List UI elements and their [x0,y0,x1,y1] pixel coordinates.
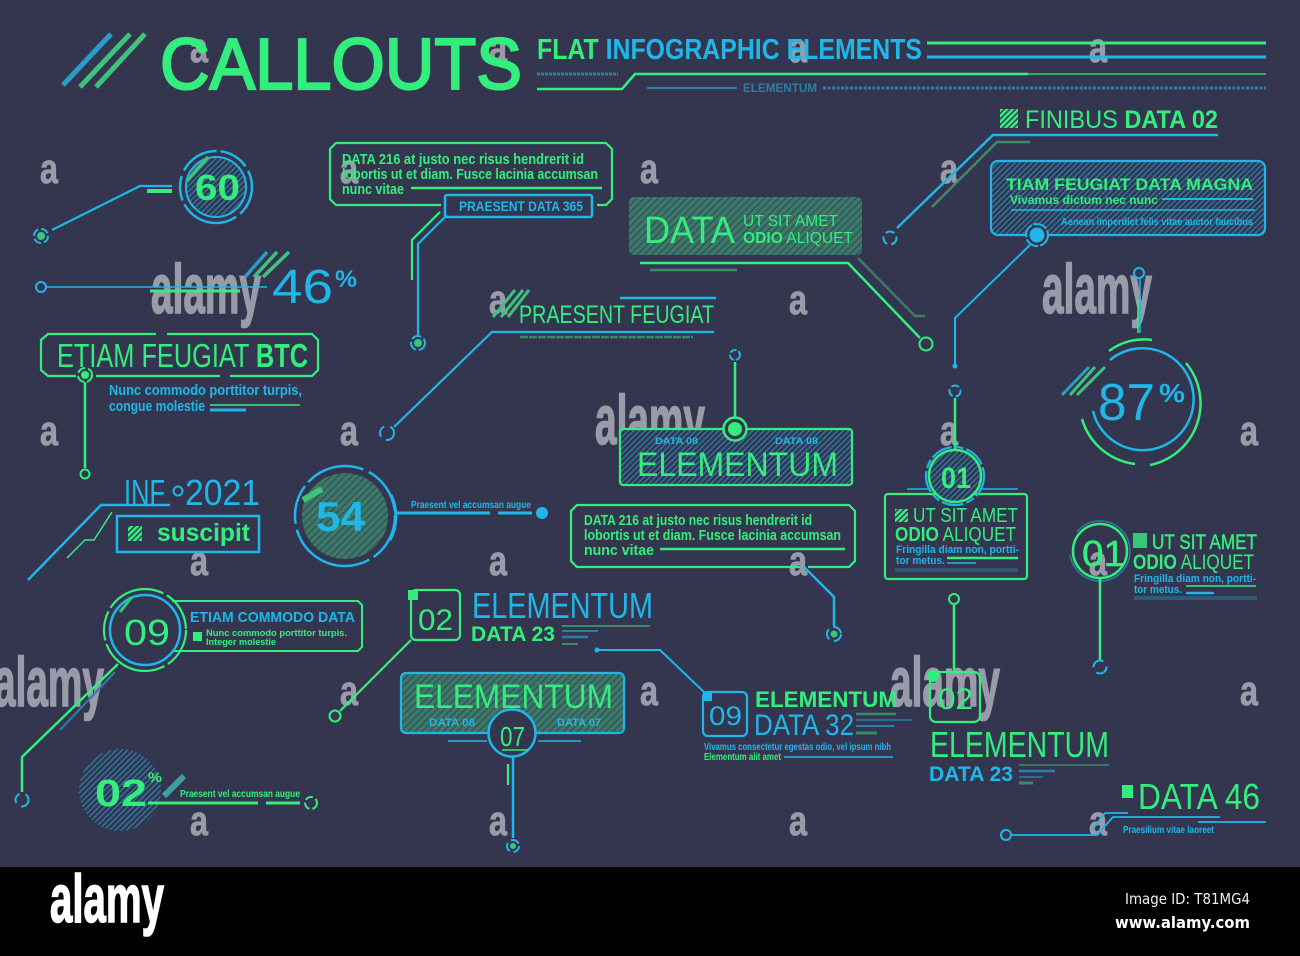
callout: tiam feugiat data magna: Aenean imperdiet felis vitae auctor faucibus [1061,217,1253,228]
text: DATA 216 at justo nec risus hendrerit id [584,512,812,529]
node [78,368,92,382]
heading: ELEMENTUM [930,724,1109,765]
callout: elementum 07: DATA 08 [429,717,475,729]
badge [1073,524,1127,578]
callout: 02 elementum right: DATA 23 [929,763,1013,786]
value: 02 [95,773,147,815]
callout: 02 percent: % [148,769,163,785]
callout: inf 2021 suscipit [28,472,260,580]
callout: 87 percent gauge: % [1159,378,1185,408]
watermark letters: a [489,24,507,71]
callout: 01 right: ODIO ALIQUET [1133,551,1254,574]
callout: 60 gauge [34,151,252,243]
icon: slashes [493,290,529,317]
badge [488,710,536,756]
caption: Praesent vel accumsan augue [180,789,300,800]
watermark letters: a [789,24,807,71]
watermark words: alamy [151,250,261,328]
watermark letters: a [1240,667,1258,714]
number box [930,672,980,722]
callout: data ut sit amet: ODIO ALIQUET [743,230,853,247]
callout: 01 box: ODIO ALIQUET [895,524,1016,546]
callout: 02 elementum left: 02 [418,604,453,637]
icon: hatched square [1000,109,1018,128]
callout: 09 etiam commodo data: Nunc commodo porttitor turpis. [206,628,347,639]
heading: PRAESENT FEUGIAT [519,301,714,329]
callout: data 216 top: nunc vitae [342,181,404,198]
description: Nunc commodo porttitor turpis, [109,382,302,399]
caption: Praesent vel accumsan augue [411,500,531,511]
icon: slash [164,776,184,796]
leader line [955,245,1030,364]
watermark letters: a [789,537,807,584]
callout: 01 box: UT SIT AMET [913,505,1018,527]
heading: ELEMENTUM [472,585,653,626]
watermark letters: a [190,537,208,584]
number box [411,590,460,640]
callout: 01 right: 01 [1082,533,1125,574]
bars [1019,765,1109,783]
callout: 09 elementum data 32: DATA 32 [754,709,854,742]
watermark words: alamy [595,381,705,459]
heading: CALLOUTS [160,25,522,105]
heading: INF [124,472,165,513]
callout: 01 box: 01 [941,462,971,495]
box [571,505,855,567]
hatched box [629,197,862,255]
callout: etiam feugiat btc [41,334,318,478]
leader line [804,567,834,626]
value: 09 [124,612,170,653]
callout: 01 box: Fringilla diam non, portti- [896,544,1019,556]
leader lines [640,263,920,338]
gauge disc [302,473,388,559]
callout: 09 elementum data 32: 09 [709,701,742,731]
watermark letters: a [640,145,658,192]
watermark letters: a [340,145,358,192]
callout: 02 elementum left: DATA 23 [471,623,555,646]
callout: elementum center [620,350,852,485]
box [172,601,362,651]
subtitle: flat infographic elements: ELEMENTUM [743,81,817,95]
value: 87 [1098,374,1155,432]
leader line [22,664,118,792]
watermark letters: a [190,797,208,844]
leader [340,640,411,711]
callout: data 46 [1001,776,1266,840]
callout: data 216 lower: lobortis ut et diam. Fusce lacinia accumsan [584,527,841,544]
bars [562,626,650,644]
icon: slashes [1062,367,1105,395]
text: ETIAM COMMODO DATA [190,609,355,626]
watermark letters: a [789,276,807,323]
value: 54 [316,493,366,540]
callout: data 216 lower [571,505,855,641]
top node [1134,268,1144,278]
leader line [594,648,600,652]
stem [512,757,514,838]
watermark letters: a [489,276,507,323]
top node [950,386,960,396]
callout: 01 box [885,386,1027,579]
subtitle: flat infographic elements [537,34,1266,95]
hatched box [991,161,1265,235]
watermark letters: a [40,407,58,454]
watermark letters: a [1240,407,1258,454]
bars [856,714,912,733]
box [117,516,259,552]
heading: ELEMENTUM [755,687,897,712]
callout: elementum center: ELEMENTUM [637,446,838,484]
callout: 09 elementum data 32: Elementum alit amet [704,752,782,763]
icon: slashes [245,252,289,277]
badge rings [110,595,180,665]
callout: 02 elementum left [330,585,653,722]
callout: finibus data 02 [884,106,1218,244]
callout: 01 right: tor metus. [1134,584,1182,596]
watermark letters: a [40,145,58,192]
heading: DATA 46 [1138,776,1260,817]
node [34,229,48,243]
callout: 09 etiam commodo data: Integer molestie [206,637,276,648]
leader line [394,332,714,427]
leader [148,802,300,804]
heading: FINIBUS DATA 02 [1025,106,1218,134]
image id: Image ID: T81MG4 [1125,890,1250,908]
callout: etiam feugiat btc: congue molestie [109,398,205,415]
leader line [1001,830,1011,840]
callout: elementum 07: DATA 07 [557,717,601,729]
box [41,334,318,376]
number box [703,692,747,736]
callout: 46 percent: % [335,266,357,293]
callout: 54 gauge [295,466,548,566]
callout: 02 elementum right [927,594,1109,786]
box [885,494,1027,579]
badge [907,488,1018,490]
footer logo: alamy [50,861,164,937]
watermark letters: a [190,24,208,71]
callout: inf 2021 suscipit: suscipit [157,519,251,547]
watermark letters: a [789,797,807,844]
text [895,509,908,522]
stem [1099,578,1101,660]
side lines [448,740,581,742]
callout: data ut sit amet: UT SIT AMET [743,213,838,230]
watermark words: alamy [1042,250,1152,328]
callout: 01 right: Fringilla diam non, portti- [1134,573,1256,585]
callout: elementum 07: 07 [500,721,525,752]
watermark letters: a [940,145,958,192]
leader lines [418,217,445,335]
hatched box [401,673,624,733]
text: DATA 216 at justo nec risus hendrerit id [342,151,584,168]
watermark letters: a [1089,537,1107,584]
top node [730,350,740,360]
text [1133,533,1147,548]
watermark letters: a [1089,24,1107,71]
callout: elementum center: DATA 08 [775,436,818,446]
callout: 02 percent [79,749,317,831]
box [330,143,612,205]
watermark words [0,250,1152,721]
website: www.alamy.com [1115,913,1250,932]
footer band [0,861,1300,956]
leader line [52,186,172,230]
stem [84,382,86,468]
watermark words: alamy [890,643,1000,721]
callout: data ut sit amet [629,197,932,350]
callout: 02 elementum right: 02 [938,683,973,716]
watermark letters: a [1240,145,1258,192]
callout: 09 etiam commodo data [16,589,362,806]
description: Vivamus consectetur egestas odio, vel ipsum nibh [704,742,891,753]
box [620,429,852,485]
gauge ring [187,158,245,216]
watermark letters: a [489,797,507,844]
caption: Praesilium vitae laoreet [1123,825,1215,836]
text: DATA [644,210,736,252]
subheading: FLAT INFOGRAPHIC ELEMENTS [537,34,922,66]
value: 46 [272,261,333,314]
node [724,418,746,440]
watermark letters: a [340,407,358,454]
callout: data 216 top: PRAESENT DATA 365 [459,198,583,214]
callout: 01 right: UT SIT AMET [1152,531,1257,554]
callout: 01 box: tor metus. [896,555,945,567]
leader line [397,512,532,514]
callout: praesent feugiat [380,290,716,440]
labels: DATA 08 [655,436,698,446]
watermark letters: a [489,537,507,584]
value: 60 [195,167,240,208]
label box [445,195,592,217]
callout: 87 percent gauge [1062,268,1201,465]
callout: data 216 top: lobortis ut et diam. Fusce lacinia accumsan [342,166,598,183]
watermark letters: a [1089,797,1107,844]
callout: 46 percent [36,252,357,314]
text: TIAM FEUGIAT DATA MAGNA [1006,175,1253,194]
callout: tiam feugiat data magna [952,161,1265,368]
callout: data 216 top [330,143,612,350]
hatched disc [79,749,161,831]
top node [949,594,959,604]
callout: tiam feugiat data magna: Vivamus dictum nec nunc [1010,193,1158,207]
leader line [28,505,170,580]
leader line [897,135,1218,228]
node [36,282,46,292]
callout: inf 2021 suscipit: 2021 [185,472,260,513]
heading: ELEMENTUM [414,678,613,716]
icon: title slashes [63,34,145,87]
callout: data 216 lower: nunc vitae [584,542,654,559]
heading: ETIAM FEUGIAT BTC [57,337,308,374]
watermark letters: a [340,667,358,714]
node [1026,224,1048,246]
callout: 01 right [1070,521,1257,674]
watermark letters: a [640,667,658,714]
icon: square [1122,785,1133,798]
rings [1109,339,1152,351]
title: callouts [63,25,522,105]
callout: 09 elementum data 32 [594,648,912,763]
callout: elementum 07 [401,673,624,852]
leader line [46,286,267,288]
watermark letters: a [940,407,958,454]
